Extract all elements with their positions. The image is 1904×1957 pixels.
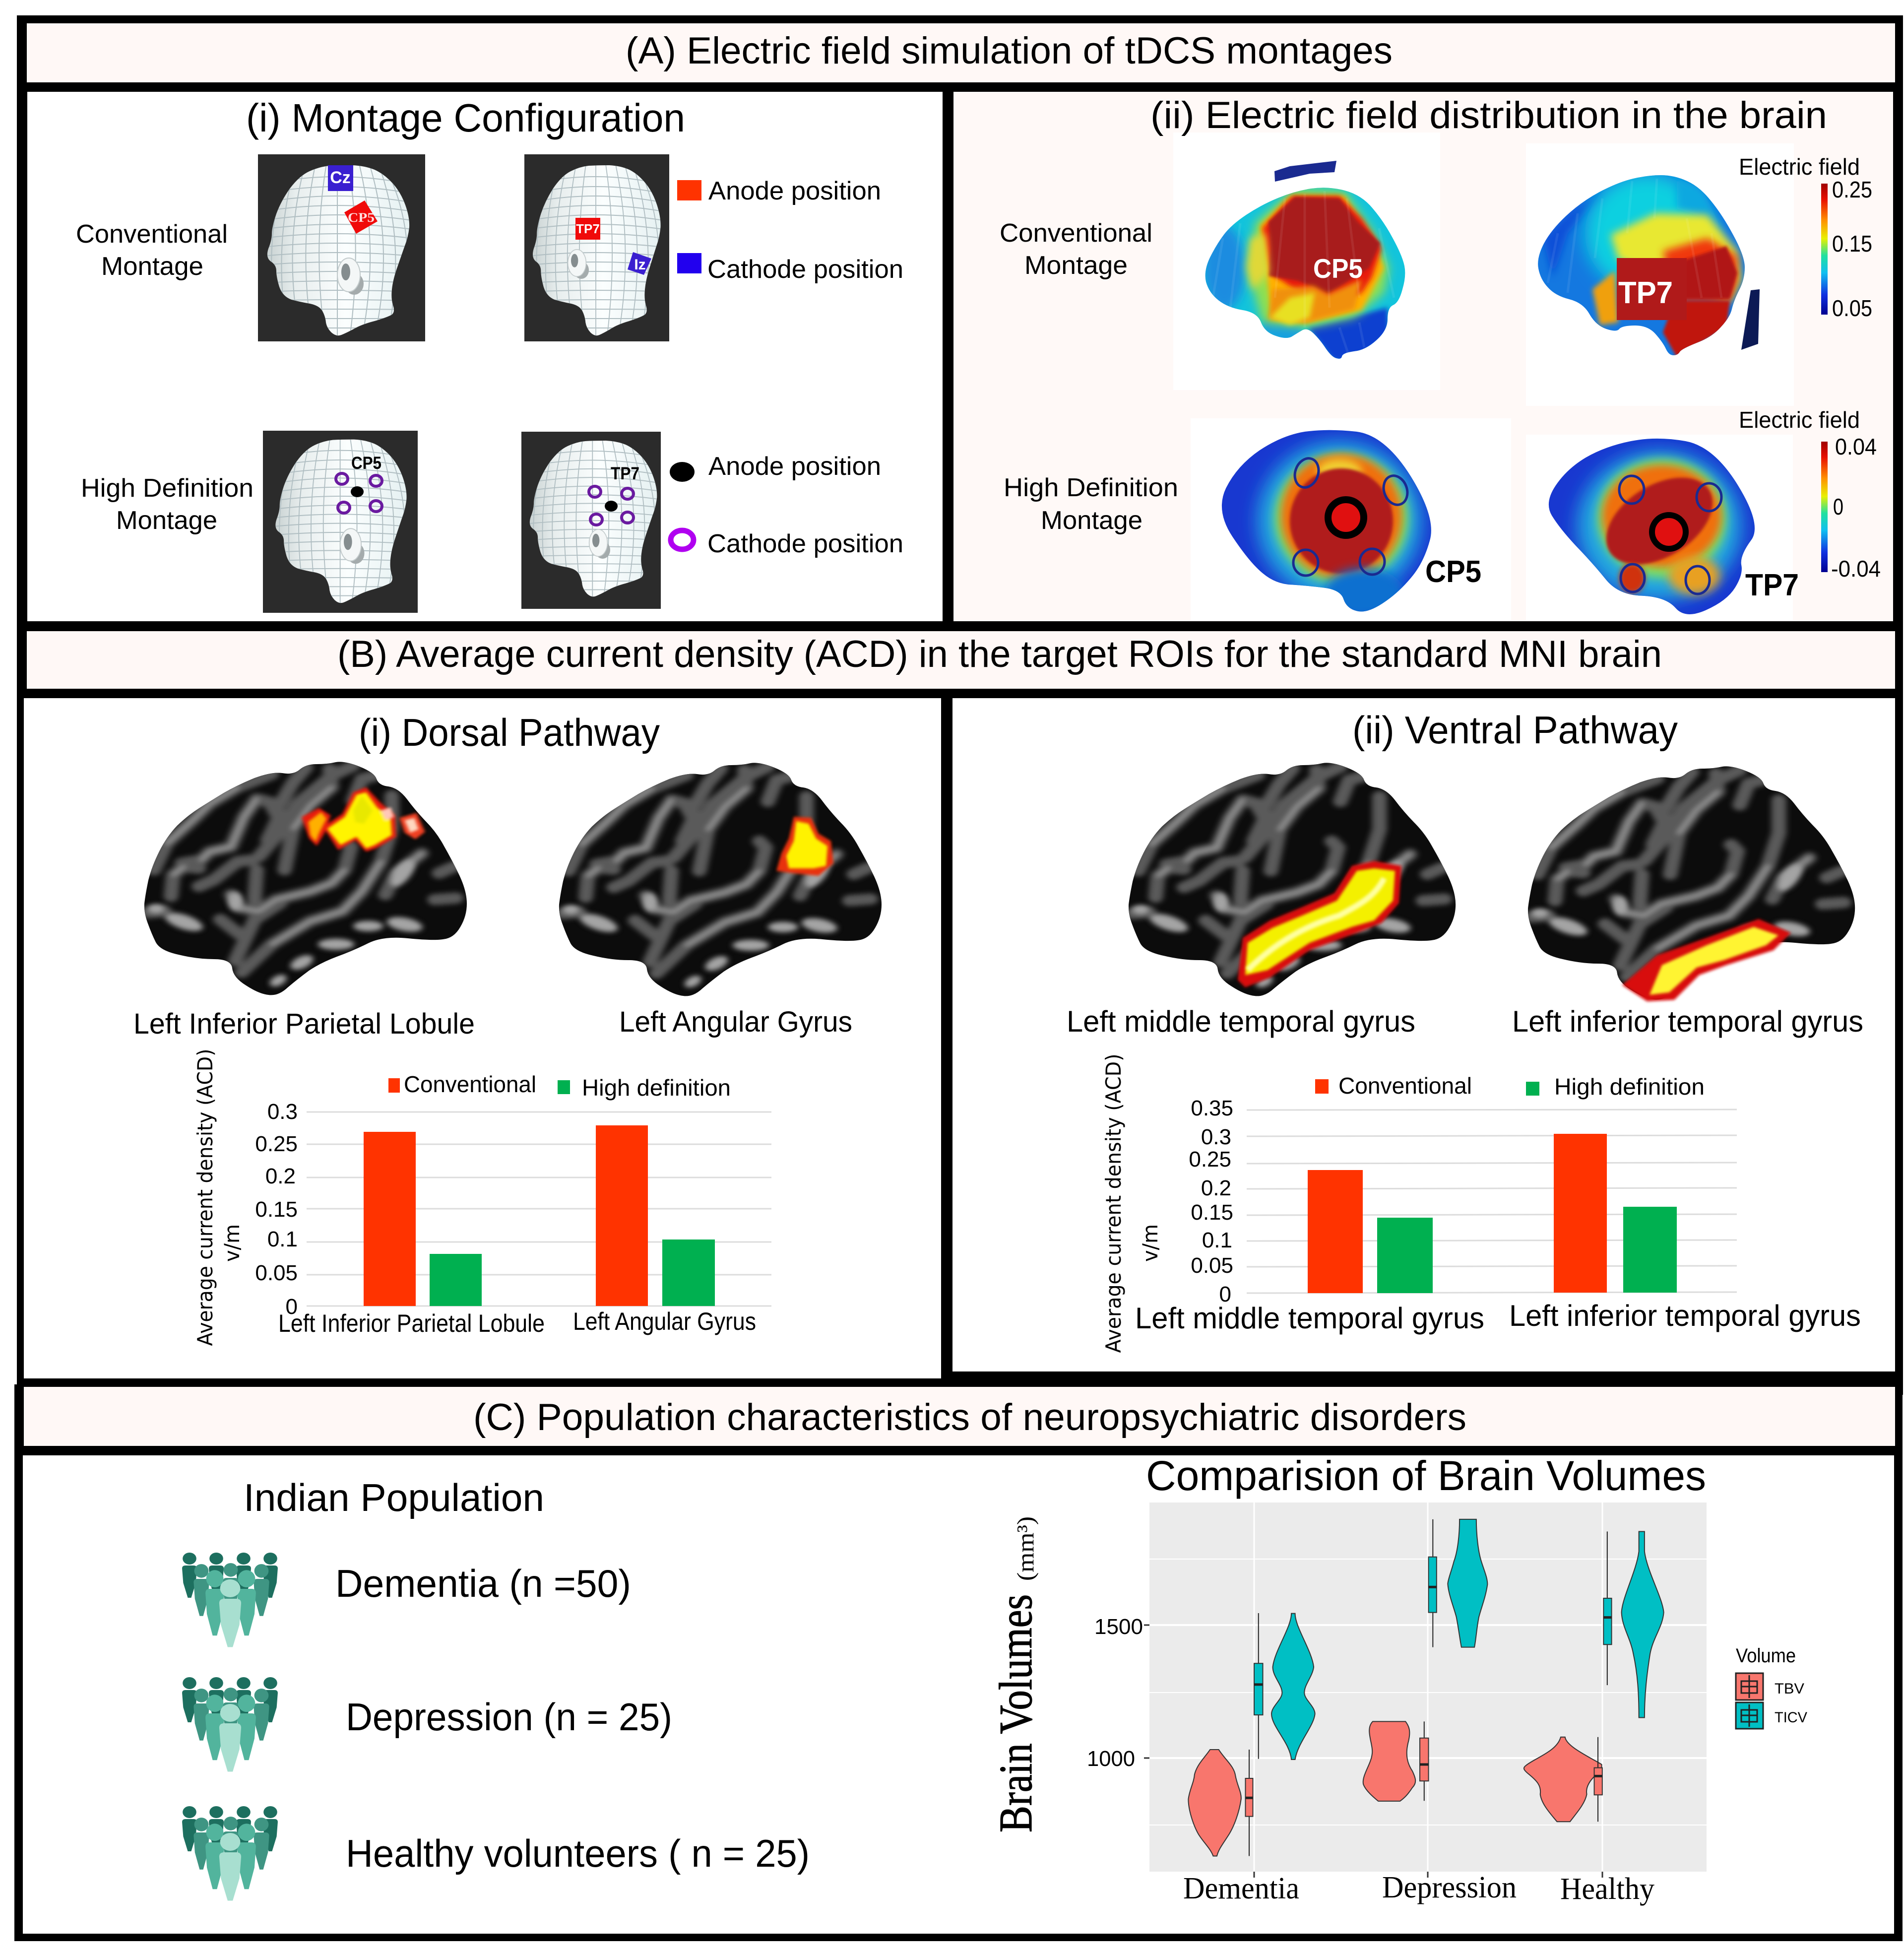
head: conventional TP7 — [524, 154, 669, 341]
x axis labels — [278, 1307, 756, 1337]
header: section B: (B) Average current density (ACD) in the target ROIs for the standard MNI brain — [337, 633, 1662, 675]
label: conventional montage — [76, 220, 228, 281]
y axis ticks — [1189, 1096, 1233, 1306]
y axis ticks — [1087, 1615, 1143, 1771]
x axis labels: Healthy — [1560, 1872, 1654, 1906]
brain: high definition TP7 field: TP7 — [1745, 568, 1799, 602]
brain: conventional CP5 field: CP5 — [1313, 253, 1363, 284]
y axis ticks: 0 — [286, 1295, 298, 1319]
y axis ticks: 0.3 — [1201, 1125, 1231, 1149]
y axis ticks: 0.3 — [267, 1100, 298, 1124]
violins and boxplots — [1188, 1519, 1664, 1856]
y axis ticks: 0.05 — [255, 1261, 298, 1285]
heading: indian population: Indian Population — [244, 1476, 544, 1519]
label: left inferior parietal lobule: Left Inferior Parietal Lobule — [133, 1008, 475, 1040]
brain: conventional TP7 field: TP7 — [1618, 276, 1673, 310]
header: section C: (C) Population characteristics of neuropsychiatric disorders — [473, 1396, 1466, 1438]
brain: left inferior parietal lobule — [144, 762, 467, 995]
label: high definition montage: Montage — [1041, 506, 1142, 535]
legend: conventional electrodes: Anode position — [708, 177, 881, 205]
y axis title: (mm³) — [1013, 1516, 1039, 1581]
colorbar: high definition electric field: 0 — [1833, 494, 1843, 520]
head: conventional CP5: Cz — [330, 168, 351, 187]
bars — [1308, 1134, 1677, 1293]
y axis ticks: 0.15 — [255, 1197, 298, 1222]
y axis ticks: 0.25 — [255, 1132, 298, 1156]
label: depression count: Depression (n = 25) — [346, 1695, 672, 1739]
legend: volume: TBV — [1775, 1681, 1804, 1697]
brain: conventional CP5 field — [1201, 161, 1414, 362]
header: section A: (A) Electric field simulation of tDCS montages — [626, 30, 1393, 72]
colorbar: conventional electric field: 0.25 — [1832, 177, 1872, 202]
x axis labels — [1135, 1299, 1861, 1335]
legend: high definition electrodes: Cathode position — [707, 529, 903, 558]
head: high definition CP5: CP5 — [351, 454, 381, 473]
colorbar: high definition electric field: Electric field — [1739, 407, 1860, 433]
legend: conventional electrodes — [677, 177, 903, 284]
label: left angular gyrus: Left Angular Gyrus — [619, 1006, 852, 1038]
y axis ticks: 0.2 — [1201, 1176, 1231, 1200]
label: left inferior temporal gyrus: Left inferior temporal gyrus — [1512, 1005, 1863, 1038]
brain: left middle temporal gyrus — [1129, 763, 1456, 996]
y axis title: v/m — [1138, 1224, 1162, 1262]
brain: high definition CP5 field: CP5 — [1425, 555, 1481, 589]
panel: electric field distribution — [953, 92, 1893, 625]
head: conventional CP5: CP5 — [348, 210, 375, 225]
label: conventional montage: Conventional — [1000, 219, 1152, 248]
legend: high definition electrodes: Anode position — [708, 452, 881, 481]
y axis title — [193, 1049, 244, 1346]
brain: high definition TP7 field — [1549, 439, 1798, 614]
legend: High definition — [1554, 1074, 1705, 1100]
x axis labels: Left inferior temporal gyrus — [1509, 1299, 1861, 1332]
label: conventional montage — [1000, 219, 1152, 280]
brain: high definition CP5 field — [1210, 427, 1481, 618]
legend — [388, 1071, 731, 1101]
colorbar: conventional electric field: Electric field — [1739, 154, 1860, 180]
y axis ticks: 0.1 — [267, 1227, 298, 1251]
bar chart: ventral ACD — [1101, 1054, 1861, 1353]
label: conventional montage: Conventional — [76, 220, 228, 249]
label: conventional montage: Montage — [1024, 251, 1128, 280]
legend: high definition electrodes — [670, 452, 903, 558]
heading: montage configuration: (i) Montage Configuration — [246, 96, 685, 140]
head: high definition TP7: TP7 — [611, 464, 639, 483]
legend: Conventional — [1338, 1073, 1472, 1099]
icon: people group dementia — [182, 1553, 278, 1647]
brain: left inferior temporal gyrus — [1528, 766, 1855, 1001]
bar chart: dorsal ACD — [193, 1049, 771, 1346]
y axis ticks — [255, 1100, 298, 1319]
bars — [364, 1125, 715, 1306]
header: section A — [27, 23, 1895, 82]
chart: comparison of brain volumes — [990, 1452, 1807, 1906]
y axis title: Brain Volumes — [990, 1594, 1042, 1832]
heading: electric field distribution: (ii) Electric field distribution in the brain — [1150, 94, 1827, 136]
y axis ticks: 1000 — [1087, 1747, 1135, 1771]
x axis labels: Left Inferior Parietal Lobule — [278, 1309, 545, 1337]
legend: Conventional — [404, 1071, 536, 1097]
y axis title — [1101, 1054, 1162, 1353]
violin: healthy TICV — [1603, 1531, 1664, 1717]
x axis labels — [1183, 1871, 1654, 1906]
y axis title: v/m — [220, 1224, 244, 1262]
label: left middle temporal gyrus: Left middle temporal gyrus — [1067, 1005, 1415, 1038]
legend: volume — [1736, 1645, 1807, 1729]
x axis labels: Depression — [1382, 1871, 1517, 1904]
y axis ticks: 0.1 — [1202, 1228, 1232, 1252]
head: high definition CP5 — [263, 431, 418, 613]
y axis title: Average current density (ACD) — [193, 1049, 217, 1346]
head: high definition TP7 — [521, 432, 661, 609]
y axis ticks: 0.05 — [1191, 1253, 1233, 1278]
label: high definition montage: High Definition — [1004, 473, 1178, 502]
y axis ticks: 0.15 — [1191, 1200, 1233, 1225]
violin: depression TBV — [1363, 1721, 1429, 1801]
heading: ventral pathway: (ii) Ventral Pathway — [1352, 708, 1678, 752]
legend: conventional electrodes: Cathode position — [707, 255, 903, 284]
violin: dementia TICV — [1254, 1613, 1315, 1760]
x axis labels: Left middle temporal gyrus — [1135, 1302, 1484, 1335]
x axis labels: Dementia — [1183, 1872, 1299, 1905]
head: conventional TP7: TP7 — [576, 221, 600, 236]
legend: volume: Volume — [1736, 1645, 1796, 1667]
y axis ticks: 0.35 — [1191, 1096, 1233, 1120]
y axis title: Average current density (ACD) — [1101, 1054, 1126, 1353]
icon: people group healthy volunteers — [182, 1806, 278, 1900]
y axis ticks: 0.25 — [1189, 1147, 1231, 1172]
legend: High definition — [582, 1075, 731, 1101]
y axis ticks: 0 — [1219, 1282, 1231, 1306]
legend: volume: TICV — [1775, 1709, 1807, 1726]
label: dementia count: Dementia (n =50) — [335, 1562, 631, 1605]
panel: ventral pathway — [952, 698, 1895, 1371]
violin: healthy TBV — [1524, 1737, 1602, 1822]
colorbar: high definition electric field: -0.04 — [1831, 556, 1881, 582]
label: high definition montage — [81, 474, 254, 535]
colorbar: conventional electric field: 0.15 — [1832, 231, 1872, 257]
y axis ticks: 0.2 — [265, 1164, 296, 1188]
y axis ticks: 1500 — [1094, 1615, 1143, 1639]
violin: dementia TBV — [1188, 1750, 1253, 1856]
header: section C — [24, 1387, 1895, 1446]
head: conventional CP5 — [258, 154, 425, 341]
colorbar: conventional electric field — [1739, 154, 1872, 321]
label: high definition montage: Montage — [116, 506, 217, 535]
heading: dorsal pathway: (i) Dorsal Pathway — [359, 711, 660, 754]
brain: left angular gyrus — [559, 763, 882, 996]
label: conventional montage: Montage — [101, 252, 203, 281]
head: conventional TP7: Iz — [634, 257, 646, 273]
panel: dorsal pathway — [24, 698, 941, 1378]
colorbar: conventional electric field: 0.05 — [1832, 295, 1872, 321]
colorbar: high definition electric field: 0.04 — [1835, 434, 1877, 459]
label: healthy volunteers count: Healthy volunteers ( n = 25) — [346, 1831, 810, 1875]
x axis labels: Left Angular Gyrus — [573, 1307, 756, 1335]
label: high definition montage: High Definition — [81, 474, 254, 503]
label: high definition montage — [1004, 473, 1178, 535]
chart title: Comparision of Brain Volumes — [1146, 1452, 1706, 1499]
legend — [1315, 1073, 1705, 1100]
icon: people group depression — [182, 1677, 278, 1771]
colorbar: high definition electric field — [1739, 407, 1881, 582]
plot area — [1144, 1502, 1707, 1878]
panel: montage configuration — [27, 92, 943, 621]
header: section B — [27, 631, 1895, 689]
panel: population characteristics — [23, 1452, 1894, 1934]
violin: depression TICV — [1429, 1519, 1487, 1647]
brain: conventional TP7 field — [1533, 171, 1760, 360]
